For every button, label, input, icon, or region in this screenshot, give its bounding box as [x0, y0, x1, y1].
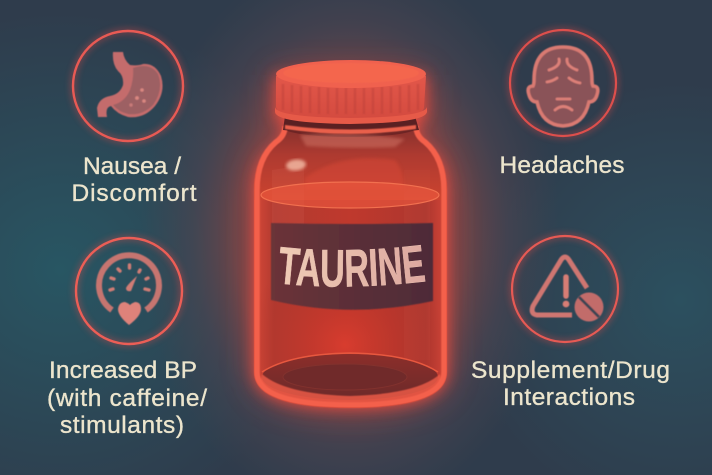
- central taurine bottle: [235, 56, 466, 426]
- panel: interactions: [471, 236, 670, 411]
- bottle body: [250, 119, 450, 415]
- icon: gauge and heart: [99, 255, 159, 325]
- panel: interactions: Interactions: [503, 384, 635, 411]
- bottle glow: [254, 75, 447, 408]
- wide bottle glow: [254, 75, 447, 408]
- ring: [512, 236, 618, 342]
- bottle base: [260, 353, 442, 406]
- cap ridges: [283, 84, 418, 114]
- panel: nausea: [72, 31, 197, 207]
- label: Headaches: [500, 152, 624, 179]
- icon: stomach: [97, 52, 163, 117]
- side sheen: [272, 165, 304, 300]
- label: Supplement/Drug: [471, 357, 670, 384]
- ring: [510, 30, 616, 136]
- label: Nausea /: [83, 153, 181, 180]
- ring: [73, 31, 183, 141]
- label band: [271, 223, 433, 310]
- panel: nausea: Discomfort: [72, 180, 197, 207]
- shoulder highlight: [300, 134, 405, 148]
- label: Increased BP: [49, 357, 197, 384]
- cap: [275, 60, 427, 134]
- neck shadow: [287, 130, 413, 137]
- highlight: [285, 158, 307, 172]
- panel: headaches: [500, 30, 624, 179]
- panel: blood pressure: stimulants): [60, 412, 184, 439]
- glass outline: [257, 126, 444, 405]
- icon: warning triangle and pill: [532, 257, 604, 322]
- icon: head: [528, 47, 598, 126]
- liquid surface: [261, 182, 439, 208]
- ring: [76, 238, 182, 344]
- panel: blood pressure: (with caffeine/: [47, 385, 207, 412]
- brand name: TAURINE: [280, 244, 426, 288]
- panel: blood pressure: [47, 238, 207, 439]
